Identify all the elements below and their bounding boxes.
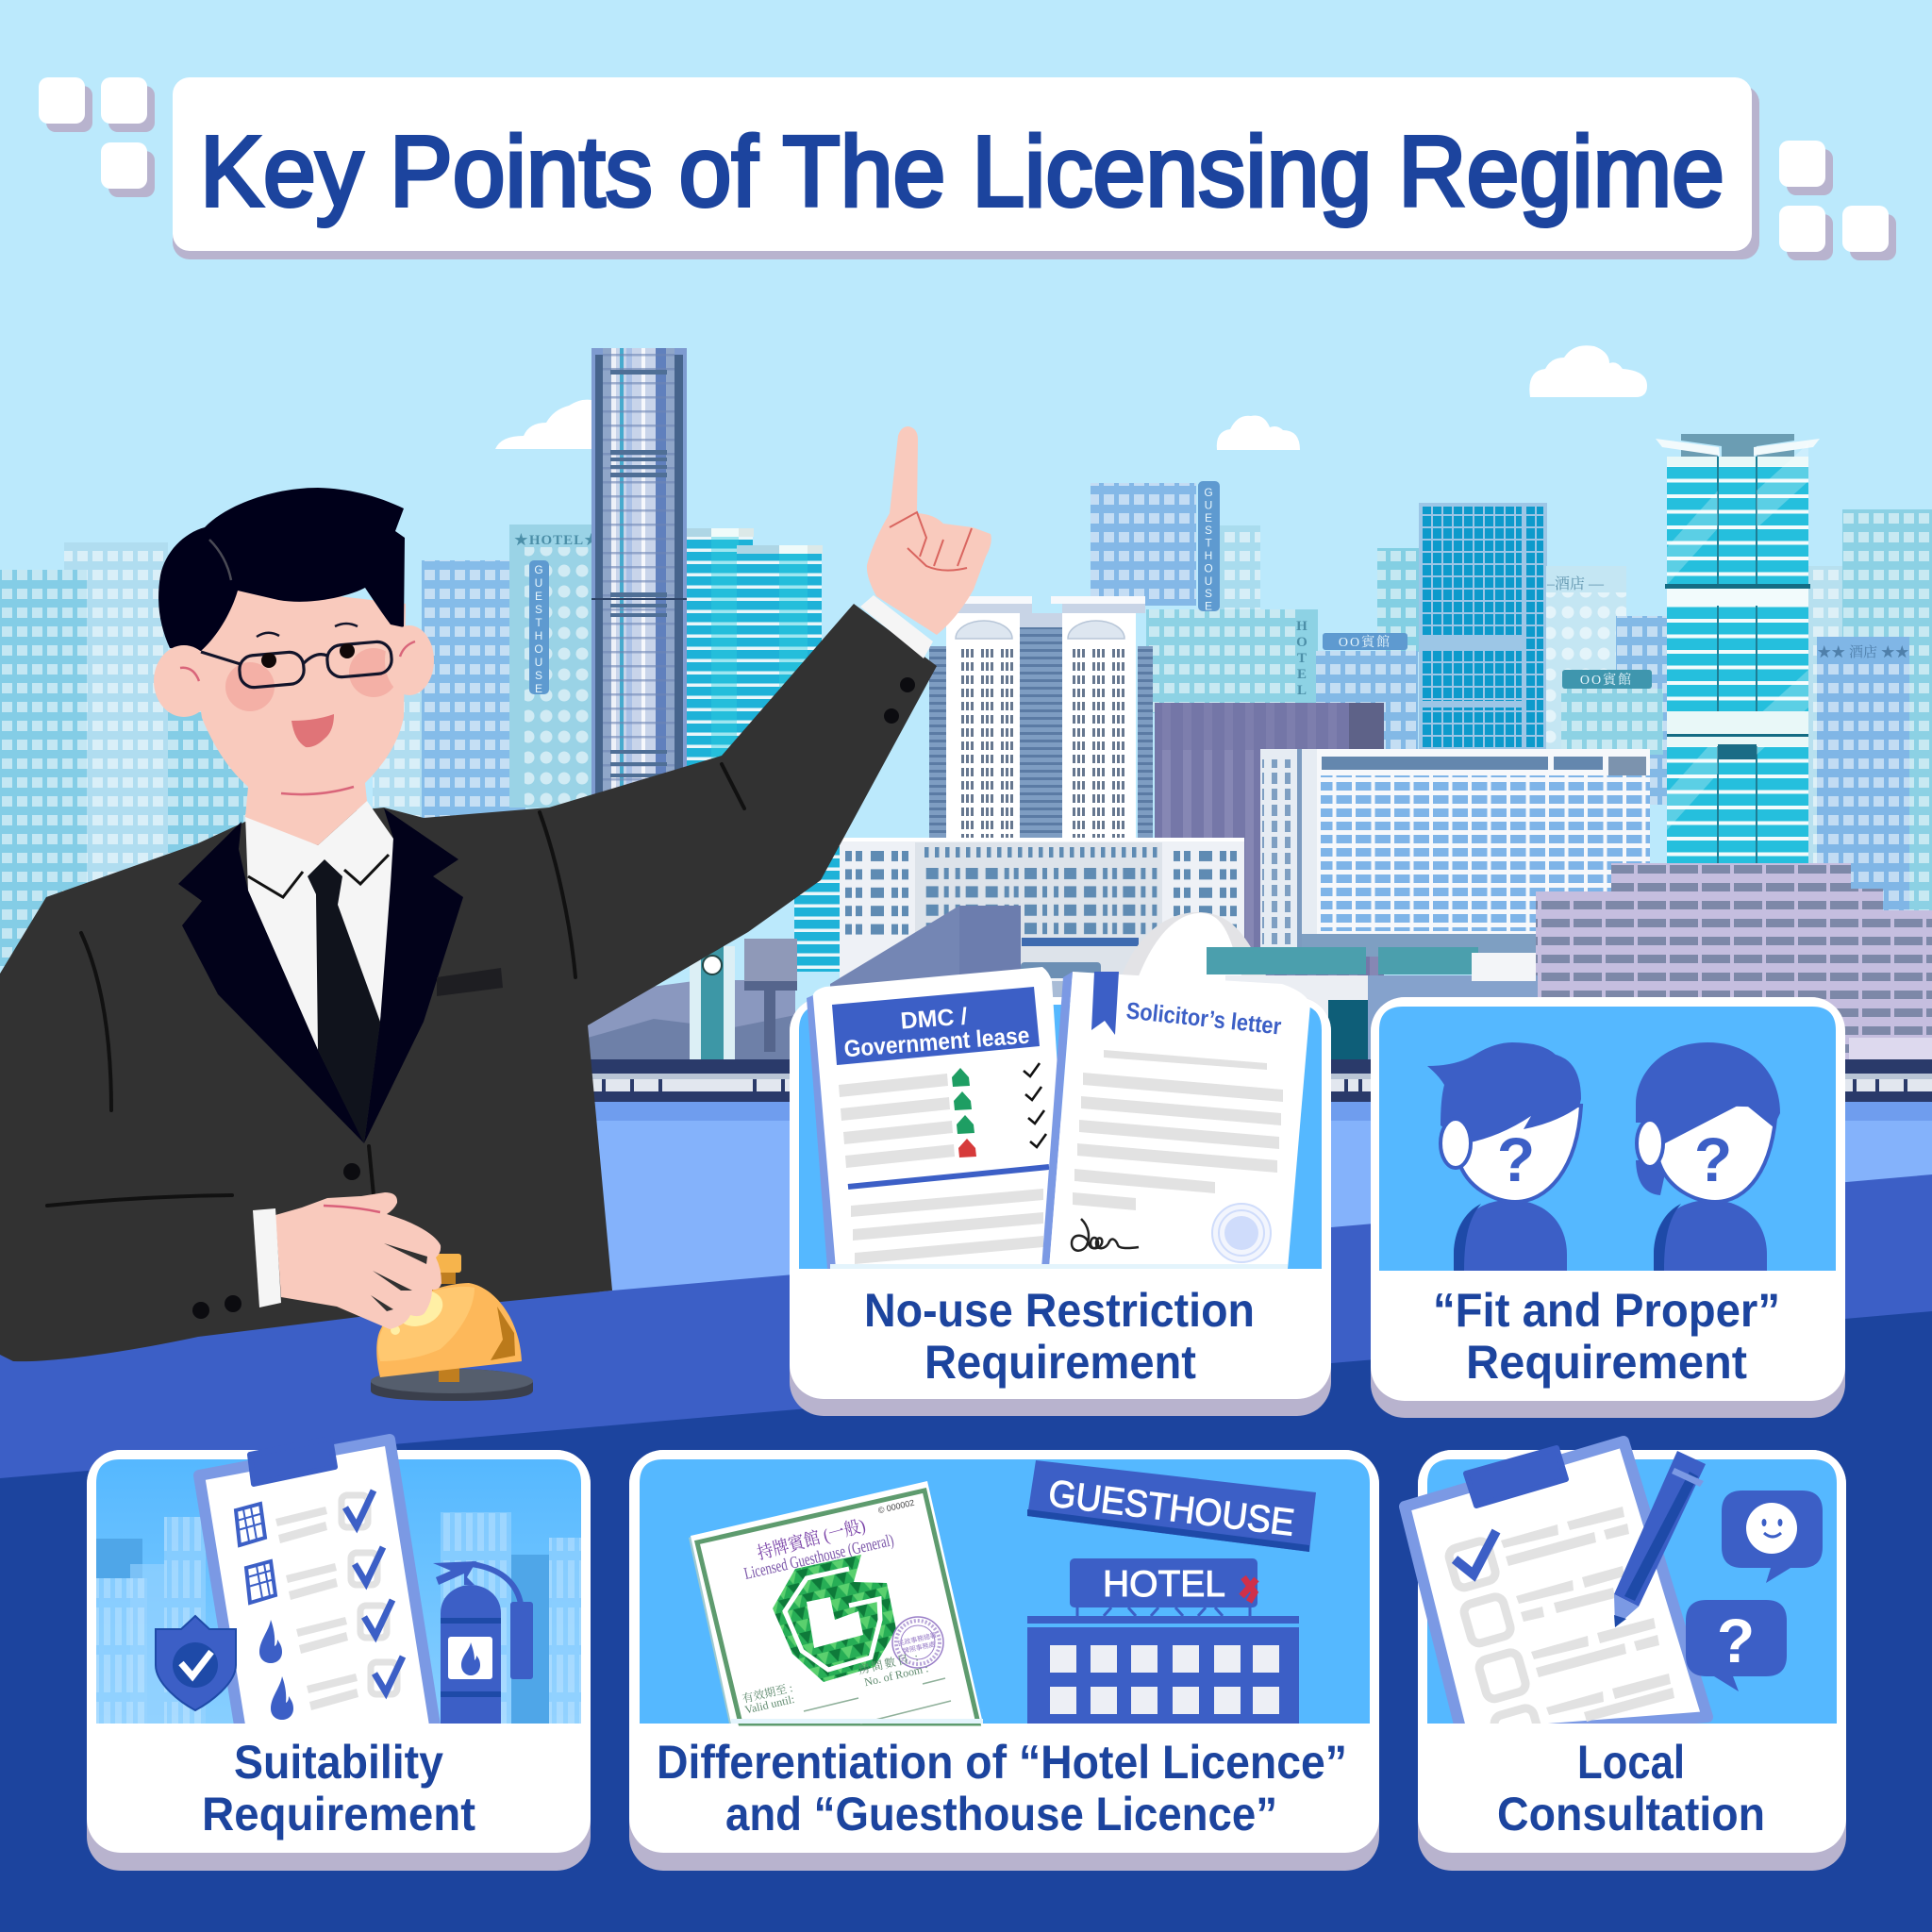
far buildings right: E bbox=[1297, 667, 1307, 682]
panel: fit and proper bbox=[1371, 997, 1845, 1418]
buttons bbox=[192, 677, 915, 1319]
bottom fade bbox=[731, 1719, 983, 1724]
bottom fade bbox=[830, 1264, 1288, 1269]
check boxes bbox=[1445, 1538, 1541, 1724]
purple building bbox=[1155, 703, 1384, 976]
far buildings right: L bbox=[1297, 683, 1307, 698]
card label: and “Guesthouse Licence” bbox=[725, 1788, 1277, 1840]
colonial low building bbox=[840, 838, 1244, 981]
jacket folds bbox=[47, 764, 744, 1206]
finger gaps bbox=[371, 1243, 427, 1311]
stamp text: 民政事務總署 bbox=[897, 1630, 938, 1648]
guesthouse logo bbox=[773, 1555, 896, 1682]
DMC / Government lease document: Government lease bbox=[843, 1023, 1030, 1062]
licence footer text: 有效期至 : bbox=[741, 1680, 794, 1706]
cheeks bbox=[225, 648, 398, 711]
DMC / Government lease document bbox=[807, 967, 1071, 1269]
person two: ? bbox=[1694, 1124, 1732, 1194]
panel: local consultation bbox=[1405, 1441, 1846, 1871]
title decoration squares right bbox=[1779, 141, 1896, 260]
card label: “Fit and Proper” bbox=[1433, 1284, 1780, 1337]
person one bbox=[1427, 1042, 1581, 1271]
foreground floor bbox=[0, 1311, 1932, 1932]
licence footer lines bbox=[804, 1678, 951, 1724]
far buildings right: OO賓館 bbox=[1580, 672, 1633, 688]
far buildings right: E bbox=[1205, 511, 1212, 525]
far buildings right: ★★ 酒店 ★★ bbox=[1817, 644, 1909, 660]
grey rows bbox=[275, 1507, 358, 1710]
guesthouse building with HOTEL sign: ★HOTEL★ bbox=[514, 533, 599, 548]
businessman bbox=[0, 426, 991, 1401]
card label bbox=[657, 1736, 1347, 1840]
speech bubble: question: ? bbox=[1717, 1606, 1755, 1675]
tall glass tower bbox=[591, 348, 687, 801]
document header text: DMC / bbox=[900, 1003, 968, 1035]
far buildings right: E bbox=[1205, 600, 1212, 613]
letter title: Solicitor’s letter bbox=[1124, 997, 1283, 1041]
lower hand bbox=[275, 1192, 441, 1329]
windows bbox=[1050, 1645, 1279, 1714]
card label bbox=[1497, 1736, 1765, 1840]
clipboard bbox=[1405, 1441, 1707, 1757]
check boxes bbox=[341, 1495, 397, 1694]
far buildings right: H bbox=[1205, 549, 1212, 562]
far buildings right: U bbox=[1205, 498, 1212, 511]
card label: Consultation bbox=[1497, 1788, 1765, 1840]
far buildings right: –酒店 –– bbox=[1546, 575, 1605, 592]
card label: Suitability bbox=[234, 1736, 443, 1789]
guesthouse building with HOTEL sign bbox=[422, 525, 599, 824]
neck and face bbox=[193, 585, 406, 845]
stamp text bbox=[897, 1630, 940, 1656]
facial lines bbox=[180, 641, 415, 794]
far buildings left bbox=[0, 542, 429, 966]
card label: Requirement bbox=[202, 1788, 475, 1840]
check marks bbox=[1024, 1063, 1046, 1147]
separator line bbox=[848, 1167, 1049, 1187]
licence document: Licensed Guesthouse (General) bbox=[742, 1530, 895, 1584]
signature bbox=[1072, 1219, 1139, 1251]
pencil bbox=[1614, 1451, 1706, 1627]
title decoration squares left bbox=[39, 77, 155, 197]
far buildings right: S bbox=[1205, 587, 1212, 600]
fire extinguisher bbox=[433, 1561, 533, 1724]
card label: Differentiation of “Hotel Licence” bbox=[657, 1736, 1347, 1789]
far buildings right bbox=[1091, 481, 1932, 915]
stamp bbox=[892, 1617, 943, 1668]
card label: Local bbox=[1577, 1736, 1685, 1789]
licence document bbox=[689, 1481, 983, 1724]
card label bbox=[864, 1284, 1255, 1389]
panel: hotel and guesthouse licence bbox=[629, 1450, 1379, 1871]
shield bbox=[156, 1616, 236, 1710]
hair bbox=[158, 488, 405, 651]
tie bbox=[308, 859, 380, 1143]
far buildings right: U bbox=[1205, 575, 1212, 588]
far buildings right: O bbox=[1296, 635, 1307, 650]
shirt bbox=[245, 801, 393, 1050]
house status icons bbox=[952, 1068, 976, 1158]
lapels bbox=[178, 808, 463, 1143]
guesthouse building with HOTEL sign: U bbox=[535, 656, 542, 669]
white twin towers bbox=[929, 596, 1153, 840]
far buildings right: OO賓館 bbox=[1339, 634, 1391, 650]
clock tower bbox=[690, 939, 797, 1092]
glasses bbox=[201, 641, 392, 689]
waterfront low structures bbox=[588, 906, 1932, 1079]
hotel sign and building: HOTEL bbox=[1103, 1564, 1225, 1605]
broken red mark bbox=[1241, 1577, 1257, 1602]
guesthouse building with HOTEL sign: T bbox=[535, 616, 542, 629]
building icons bbox=[236, 1504, 275, 1603]
reception counter bbox=[0, 1174, 1932, 1932]
far buildings right: H bbox=[1296, 619, 1307, 634]
far buildings right: S bbox=[1205, 524, 1212, 537]
far buildings right: T bbox=[1297, 651, 1307, 666]
guesthouse building with HOTEL sign: G bbox=[534, 563, 543, 576]
far buildings right: G bbox=[1204, 486, 1213, 499]
raised cuff bbox=[860, 595, 933, 658]
teal towers left bbox=[687, 528, 841, 972]
water bbox=[585, 1102, 1932, 1385]
card label: Requirement bbox=[924, 1336, 1196, 1389]
bell bbox=[371, 1254, 533, 1401]
licence footer text: No. of Room : bbox=[863, 1661, 929, 1689]
guesthouse building with HOTEL sign: E bbox=[535, 590, 542, 603]
speech bubble: smile bbox=[1722, 1491, 1823, 1583]
solicitor's letter document bbox=[830, 972, 1310, 1269]
document rows bbox=[839, 1074, 1043, 1264]
far buildings right: O bbox=[1204, 561, 1213, 575]
logo white outline bbox=[785, 1569, 880, 1670]
licence footer text: 房間數目 : bbox=[857, 1649, 921, 1676]
lower hand line bbox=[324, 1206, 380, 1212]
wide hotel bbox=[1260, 749, 1650, 957]
panel: no-use restriction bbox=[790, 967, 1331, 1416]
ears bbox=[154, 625, 434, 717]
guesthouse sign: GUESTHOUSE bbox=[1046, 1473, 1296, 1544]
guesthouse building with HOTEL sign: H bbox=[535, 629, 542, 642]
card label: No-use Restriction bbox=[864, 1284, 1255, 1337]
guesthouse building with HOTEL sign: O bbox=[534, 642, 543, 656]
card label: Requirement bbox=[1466, 1336, 1747, 1389]
pointing hand lines bbox=[890, 512, 972, 571]
card label bbox=[1433, 1284, 1780, 1389]
lower cuff bbox=[253, 1208, 281, 1307]
guesthouse building with HOTEL sign: U bbox=[535, 576, 542, 590]
title panel bbox=[173, 77, 1759, 259]
person one: ? bbox=[1497, 1124, 1535, 1194]
hair highlight bbox=[209, 540, 231, 580]
licence footer text bbox=[741, 1647, 929, 1717]
guesthouse building with HOTEL sign: E bbox=[535, 682, 542, 695]
background buildings bbox=[96, 1512, 581, 1724]
title: Key Points of The Licensing Regime bbox=[200, 116, 1724, 227]
guesthouse building with HOTEL sign: S bbox=[535, 603, 542, 616]
card label bbox=[202, 1736, 475, 1840]
licence document: © 000002 bbox=[877, 1498, 915, 1515]
purple low-rise bbox=[1536, 863, 1932, 1061]
far buildings right: T bbox=[1205, 537, 1212, 550]
flame icons bbox=[259, 1620, 293, 1720]
harbour railing bbox=[585, 1059, 1932, 1103]
pointing hand bbox=[867, 426, 991, 635]
hotel sign and building bbox=[1027, 1558, 1299, 1724]
check marks bbox=[345, 1491, 403, 1692]
clouds bbox=[495, 345, 1647, 450]
eyebrows bbox=[257, 624, 358, 637]
stamp text: 牌照事務處 bbox=[902, 1640, 936, 1656]
eyes bbox=[261, 643, 355, 668]
guesthouse building with HOTEL sign: S bbox=[535, 669, 542, 682]
collar lines bbox=[248, 855, 389, 897]
speech bubble: question bbox=[1686, 1600, 1787, 1691]
licence footer text: Valid until: bbox=[743, 1692, 796, 1717]
jacket bbox=[0, 604, 937, 1361]
seal bbox=[1212, 1204, 1271, 1262]
breast pocket bbox=[437, 968, 503, 996]
skyline bbox=[0, 345, 1932, 1103]
main striped tower bbox=[1656, 434, 1820, 863]
form rows bbox=[1501, 1507, 1674, 1722]
mouth bbox=[291, 714, 334, 747]
letter lines bbox=[1073, 1050, 1283, 1210]
licence headings: 持牌賓館 (一般) bbox=[755, 1515, 868, 1564]
clipboard bbox=[199, 1439, 436, 1731]
check mark bbox=[1455, 1531, 1496, 1574]
person two bbox=[1636, 1042, 1780, 1271]
panel: suitability bbox=[87, 1439, 591, 1871]
